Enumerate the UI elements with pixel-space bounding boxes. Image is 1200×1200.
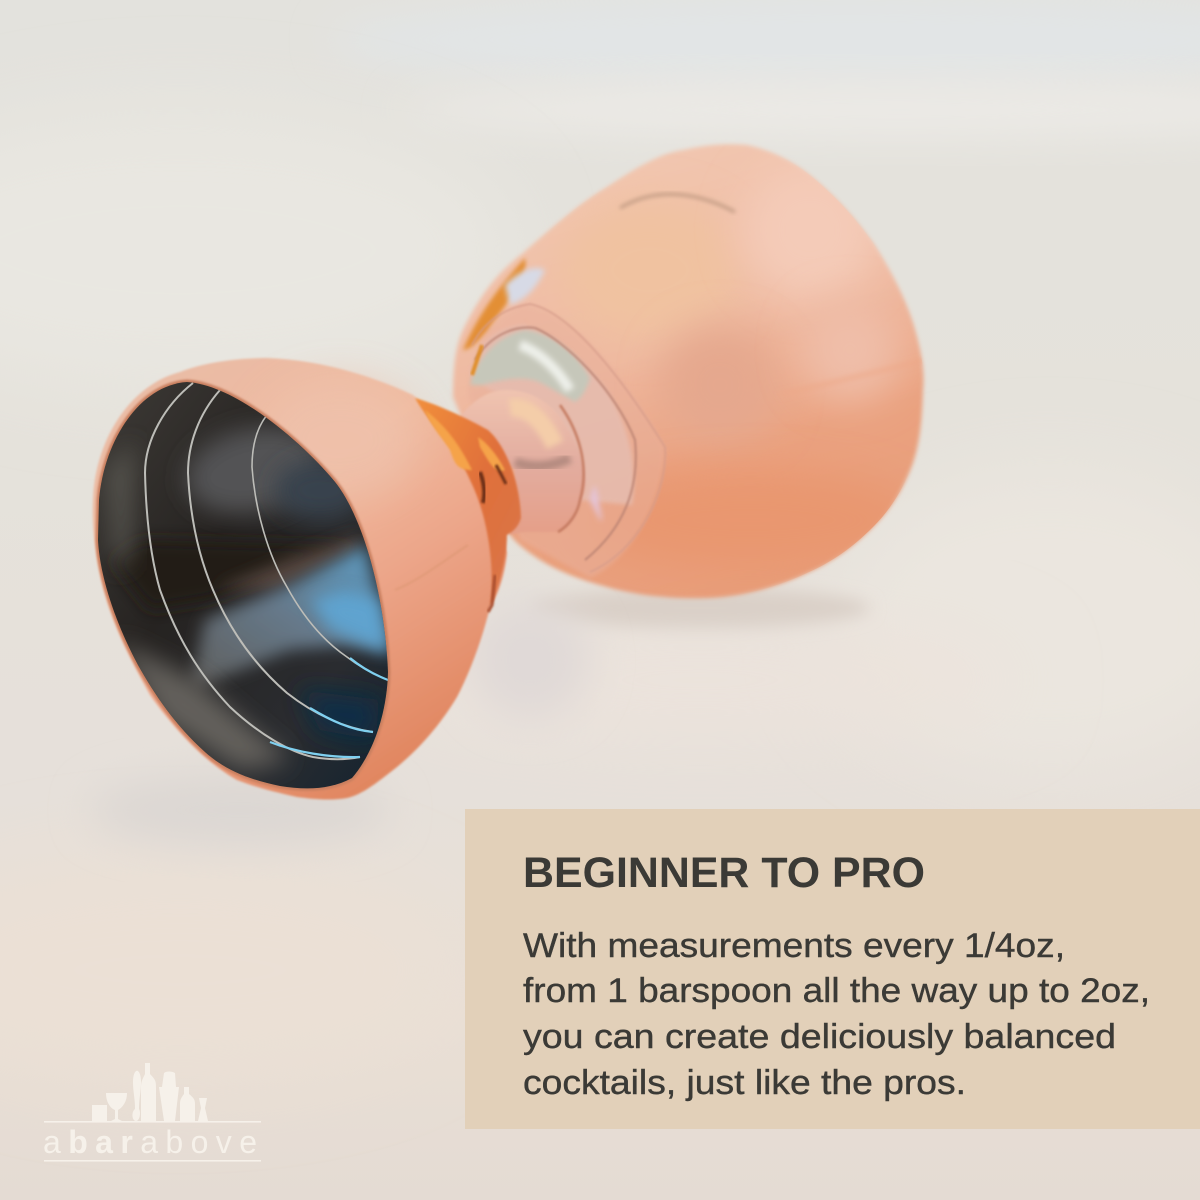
jigger: small cup with interior bbox=[90, 358, 521, 800]
logo rules bbox=[44, 1121, 261, 1123]
reflection on large cup shoulder bbox=[463, 258, 526, 350]
seam line bbox=[395, 545, 468, 590]
jigger: large cup bbox=[453, 144, 925, 598]
heading: BEGINNER TO PRO bbox=[523, 849, 925, 897]
body text: cocktails, just like the pros. bbox=[523, 1064, 966, 1102]
cup interior bbox=[90, 375, 400, 795]
collar bbox=[415, 398, 521, 607]
text panel bbox=[465, 809, 1200, 1129]
stem bbox=[460, 390, 585, 535]
wordmark: abarabove bbox=[43, 1124, 257, 1160]
logo: a bar above bbox=[43, 1063, 261, 1162]
body text: With measurements every 1/4oz, bbox=[523, 927, 1065, 965]
icon: bar tools silhouettes bbox=[92, 1063, 208, 1121]
body text: from 1 barspoon all the way up to 2oz, bbox=[523, 972, 1150, 1010]
body text: you can create deliciously balanced bbox=[523, 1018, 1116, 1056]
body text bbox=[523, 927, 1150, 1102]
measurement rings bbox=[145, 383, 360, 759]
rim highlight on small cup bbox=[98, 382, 388, 788]
small cup outer body bbox=[93, 358, 507, 800]
base rings and chrome reflection bbox=[468, 305, 665, 578]
